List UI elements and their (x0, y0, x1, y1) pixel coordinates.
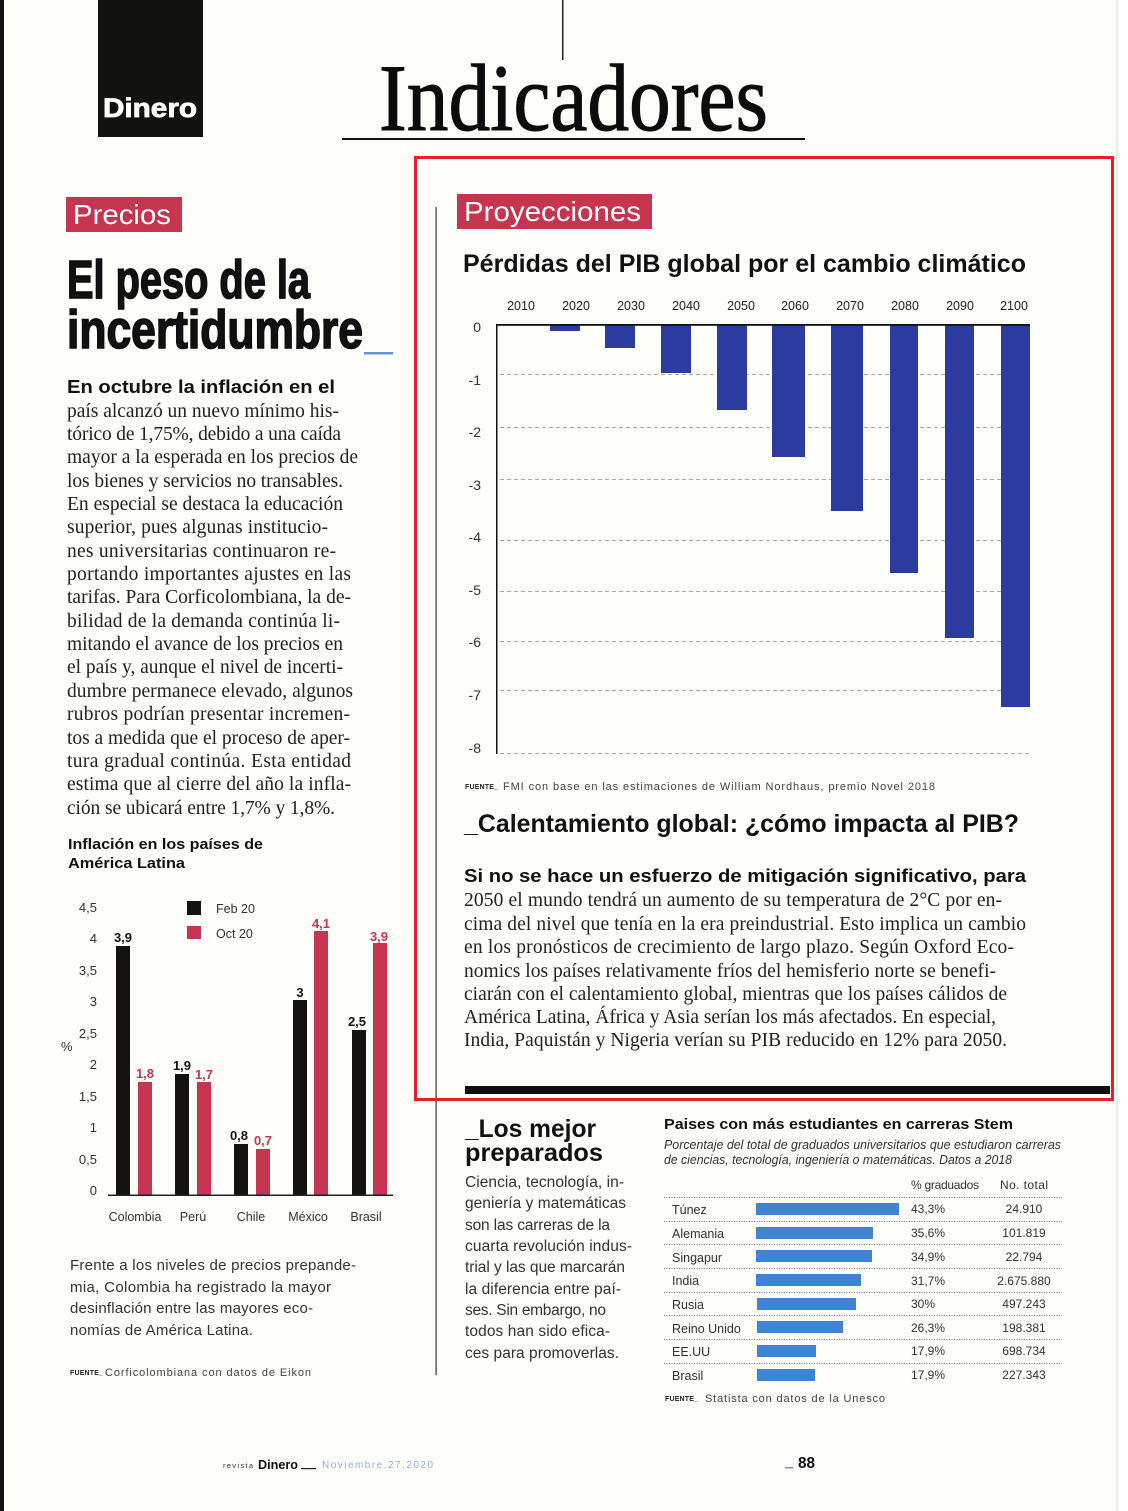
headline: El peso de la incertidumbre: incertidumbre (67, 300, 363, 360)
chart title: Inflación en los países de América Latina (68, 836, 263, 872)
y axis labels: 1 (90, 1120, 97, 1135)
text block: inflation article: mitando el avance de los precios en (67, 634, 343, 655)
country labels: México (288, 1210, 328, 1224)
row: Reino Unido (672, 1321, 1046, 1336)
text block: global warming article: India, Paquistán y Nigeria verían su PIB reducido en 12% para 2050. (464, 1030, 1007, 1051)
value labels: 3 (296, 985, 304, 1000)
row: Singapur (672, 1250, 1043, 1265)
text block: inflation article: rubros podrían presentar incremen- (67, 704, 350, 725)
country labels (109, 1210, 382, 1224)
value labels: 1,8 (136, 1066, 154, 1081)
section title: Indicadores: Indicadores (379, 45, 768, 151)
row: EE.UU: 698.734 (1002, 1344, 1046, 1358)
text block: global warming article: América Latina, África y Asia serían los más afectados. En especial, (464, 1006, 996, 1028)
y axis labels: % (61, 1039, 73, 1054)
source: FMI: FUENTE_ (465, 784, 498, 791)
chart heading: Pérdidas del PIB global: Pérdidas del PIB global por el cambio climático (463, 250, 1026, 278)
value labels: 4,1 (312, 916, 330, 931)
y axis values: -6 (469, 634, 481, 650)
y axis labels: 0,5 (79, 1152, 97, 1167)
tag: Precios: Precios (73, 199, 171, 230)
y axis values: -1 (469, 372, 481, 388)
chart title: Inflación en los países de América Latina: Inflación en los países de (68, 836, 263, 853)
source: Statista: FUENTE_ (665, 1396, 698, 1403)
value labels: 1,7 (195, 1067, 213, 1082)
text block: STEM careers: la diferencia entre paí- (465, 1281, 621, 1298)
year labels (507, 299, 1028, 313)
row: Alemania: 35,6% (911, 1226, 945, 1240)
table heading: Paises con más estudiantes en carreras Stem (664, 1116, 1061, 1167)
value labels: 2,5 (348, 1014, 366, 1029)
column divider (436, 207, 437, 1375)
headline: El peso de la incertidumbre (67, 250, 393, 360)
text block: STEM careers: todos han sido efica- (465, 1323, 610, 1340)
tag: Proyecciones: Proyecciones (464, 196, 641, 227)
year labels: 2030 (617, 299, 645, 313)
row: Reino Unido: Reino Unido (672, 1322, 741, 1336)
row: Rusia: Rusia (672, 1298, 704, 1312)
column headers: No. total (1000, 1178, 1048, 1192)
year labels: 2010 (507, 299, 535, 313)
text block: inflation article: nes universitarias continuaron re- (67, 541, 336, 562)
text block: inflation article: superior, pues algunas institucio- (67, 517, 328, 538)
y axis labels: 0 (90, 1183, 97, 1198)
country labels: Brasil (350, 1210, 382, 1224)
row: Singapur: Singapur (672, 1251, 722, 1265)
text block: global warming article (464, 866, 1027, 1051)
year labels: 2060 (781, 299, 809, 313)
y axis values: -3 (469, 477, 481, 493)
y axis labels (61, 900, 97, 1198)
text block: inflation article: dumbre permanece elevado, algunos (67, 681, 353, 702)
y axis labels: 3,5 (79, 963, 97, 978)
row: India (672, 1274, 1051, 1288)
legend: Oct 20 (216, 927, 253, 941)
country labels: Chile (237, 1210, 265, 1224)
value labels: 0,7 (254, 1133, 272, 1148)
footer: page number: 88 (798, 1455, 815, 1472)
row: Alemania: Alemania (672, 1227, 724, 1241)
year labels: 2050 (727, 299, 755, 313)
bar chart: inflation in Latin America (61, 900, 393, 1224)
text block: STEM careers: ces para promoverlas. (465, 1345, 619, 1362)
text block: STEM careers: Ciencia, tecnología, in- (465, 1174, 624, 1191)
y axis values: -7 (469, 687, 481, 703)
highlight frame: Proyecciones panel (416, 158, 1112, 1100)
masthead: Dinero logo block (98, 0, 203, 137)
text block: STEM careers: cuarta revolución indus- (465, 1238, 632, 1255)
legend (187, 901, 255, 941)
year labels: 2040 (672, 299, 700, 313)
text block: global warming article: 2050 el mundo tendrá un aumento de su temperatura de 2°C por en- (464, 890, 1002, 911)
heading: Los mejor preparados (464, 1115, 603, 1167)
heading: Los mejor preparados: _Los mejor (464, 1115, 596, 1143)
value labels: 3,9 (114, 930, 132, 945)
text block: STEM careers: ses. Sin embargo, no (465, 1302, 606, 1319)
row: Rusia: 497.243 (1002, 1297, 1046, 1311)
source: Statista: Statista con datos de la Unesco (705, 1393, 885, 1405)
text block: desinflación note (70, 1257, 356, 1339)
text block: inflation article: portando importantes ajustes en las (67, 564, 351, 585)
table heading: Paises con más estudiantes en carreras Stem: Porcentaje del total de graduados universitarios que estudiaron carreras (664, 1138, 1061, 1152)
text block: STEM careers: trial y las que marcarán (465, 1259, 625, 1276)
y axis labels: 3 (90, 994, 97, 1009)
table heading: Paises con más estudiantes en carreras Stem: de ciencias, tecnología, ingeniería o matemáticas. Datos a 2018 (664, 1153, 1012, 1167)
text block: inflation article: los bienes y servicios no transables. (67, 471, 343, 492)
footer: page number (785, 1455, 815, 1472)
value labels (114, 916, 388, 1148)
column headers: % graduados (911, 1178, 979, 1192)
year labels: 2080 (891, 299, 919, 313)
text block: desinflación note: nomías de América Latina. (70, 1322, 253, 1339)
text block: inflation article: el país y, aunque el nivel de incerti- (67, 657, 343, 678)
text block: inflation article: En especial se destaca la educación (67, 494, 343, 515)
text block: inflation article: tarifas. Para Corficolombiana, la de- (67, 587, 351, 608)
y axis labels: 1,5 (79, 1089, 97, 1104)
text block: desinflación note: Frente a los niveles de precios prepande- (70, 1257, 356, 1274)
value labels: 1,9 (173, 1058, 191, 1073)
footer: magazine credit: Dinero (258, 1458, 298, 1472)
row: Brasil: 227.343 (1002, 1368, 1046, 1382)
y axis values: -8 (469, 740, 481, 756)
text block: global warming article: nomics los países relativamente fríos del hemisferio norte se benefi- (464, 961, 996, 982)
chart title: Inflación en los países de América Latina: América Latina (68, 855, 186, 872)
y axis labels: 4 (90, 931, 97, 946)
text block: global warming article: Si no se hace un esfuerzo de mitigación significativo, para (464, 866, 1027, 886)
y axis values: -2 (469, 424, 481, 440)
y axis values: 0 (473, 319, 481, 335)
text block: inflation article: tura gradual continúa. Esta entidad (67, 751, 351, 772)
year labels: 2070 (836, 299, 864, 313)
masthead: Dinero logo block: Dinero (103, 93, 197, 123)
y axis labels: 4,5 (79, 900, 97, 915)
row: Túnez (672, 1202, 1043, 1217)
heading: Calentamiento global: _Calentamiento global: ¿cómo impacta al PIB? (463, 810, 1019, 838)
row: Reino Unido: 198.381 (1002, 1321, 1046, 1335)
row: Singapur: 34,9% (911, 1250, 945, 1264)
row: India: 31,7% (911, 1274, 945, 1288)
row: EE.UU: EE.UU (672, 1345, 710, 1359)
source: Corficolombiana: Corficolombiana con datos de Eikon (105, 1367, 311, 1379)
y axis values (469, 319, 481, 756)
blue bars (550, 325, 1030, 707)
table heading: Paises con más estudiantes en carreras Stem: Paises con más estudiantes en carreras Stem (664, 1116, 1013, 1133)
text block: inflation article: tos a medida que el proceso de aper- (67, 728, 350, 749)
country labels: Colombia (109, 1210, 161, 1224)
text block: inflation article: país alcanzó un nuevo mínimo his- (67, 401, 339, 422)
row: Túnez: 43,3% (911, 1202, 945, 1216)
row: EE.UU (672, 1344, 1046, 1359)
heading: Los mejor preparados: preparados (465, 1139, 603, 1167)
value labels: 3,9 (370, 929, 388, 944)
column headers (911, 1178, 1048, 1192)
row: Reino Unido: 26,3% (911, 1321, 945, 1335)
row: Túnez: 24.910 (1006, 1202, 1043, 1216)
bars: Feb 20 (116, 946, 366, 1195)
row: Túnez: Túnez (672, 1203, 707, 1217)
text block: desinflación note: desinflación entre las mayores eco- (70, 1300, 313, 1317)
row: Brasil: 17,9% (911, 1368, 945, 1382)
text block: STEM careers: son las carreras de la (465, 1217, 610, 1234)
source: FMI: FMI con base en las estimaciones de William Nordhaus, premio Novel 2018 (503, 781, 935, 793)
text block: inflation article: estima que al cierre del año la infla- (67, 774, 351, 795)
source: Corficolombiana: FUENTE_ (70, 1370, 103, 1377)
value labels: 0,8 (230, 1128, 248, 1143)
headline: El peso de la incertidumbre: El peso de la (67, 250, 311, 310)
row: India: 2.675.880 (997, 1274, 1051, 1288)
text block: inflation article: ción se ubicará entre 1,7% y 1,8%. (67, 798, 335, 819)
text block: inflation article: En octubre la inflación en el (67, 377, 335, 397)
text block: inflation article: mayor a la esperada en los precios de (67, 447, 358, 468)
row: Alemania (672, 1226, 1046, 1241)
y axis values: -5 (469, 582, 481, 598)
year labels: 2090 (946, 299, 974, 313)
text block: global warming article: cima del nivel que tenía en la era preindustrial. Esto implica un cambio (464, 914, 1026, 935)
legend: Feb 20 (216, 902, 255, 916)
text block: STEM careers: geniería y matemáticas (465, 1195, 626, 1212)
text block: STEM careers (465, 1174, 632, 1362)
text block: inflation article: tórico de 1,75%, debido a una caída (67, 424, 341, 445)
year labels: 2020 (562, 299, 590, 313)
text block: inflation article: bilidad de la demanda continúa li- (67, 611, 340, 632)
text block: global warming article: ciarán con el calentamiento global, mientras que los países cálidos de (464, 984, 1007, 1005)
row: Rusia: 30% (911, 1297, 935, 1311)
y axis labels: 2,5 (79, 1026, 97, 1041)
row: Alemania: 101.819 (1002, 1226, 1046, 1240)
row: Brasil: Brasil (672, 1369, 703, 1383)
row: India: India (672, 1274, 699, 1288)
year labels: 2100 (1000, 299, 1028, 313)
row: EE.UU: 17,9% (911, 1344, 945, 1358)
thick divider bar (465, 1086, 1110, 1094)
row: Singapur: 22.794 (1006, 1250, 1043, 1264)
footer: magazine credit: revista (223, 1461, 254, 1470)
footer: magazine credit (223, 1458, 433, 1472)
country labels: Perú (180, 1210, 206, 1224)
text block: desinflación note: mia, Colombia ha registrado la mayor (70, 1279, 331, 1296)
footer: magazine credit: Noviembre.27.2020 (322, 1460, 433, 1471)
row: Brasil (672, 1368, 1046, 1383)
y axis labels: 2 (90, 1057, 97, 1072)
bar chart: GDP losses from climate change (469, 299, 1030, 756)
bars: Oct 20 (138, 931, 387, 1195)
text block: global warming article: en los pronósticos de crecimiento de largo plazo. Según Oxford Eco- (464, 937, 1014, 958)
text block: inflation article (67, 377, 358, 819)
row: Rusia (672, 1297, 1046, 1312)
y axis values: -4 (469, 529, 481, 545)
table: STEM graduates by country (664, 1178, 1062, 1383)
